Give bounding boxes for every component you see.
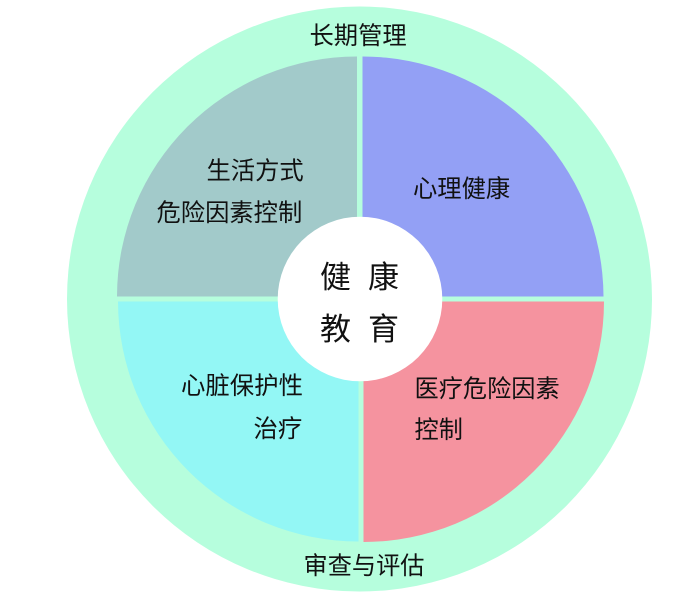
quadrant: mental health <box>362 56 604 296</box>
label: medical risk factor control <box>414 376 560 444</box>
label: cardioprotective therapy: 心脏保护性 <box>181 373 303 400</box>
label: lifestyle risk factor control: 生活方式 <box>206 158 304 185</box>
quadrant: cardioprotective therapy <box>118 302 358 542</box>
quadrant: lifestyle risk factor control <box>117 56 357 296</box>
center heading: health education: 健 <box>320 260 351 295</box>
center circle <box>278 217 442 381</box>
ring label: review and assessment: 审查与评估 <box>304 553 424 580</box>
label: cardioprotective therapy <box>181 373 303 443</box>
quadrant: medical risk factor control <box>364 302 604 542</box>
label: medical risk factor control: 控制 <box>414 417 463 444</box>
label: medical risk factor control: 医疗危险因素 <box>414 376 560 403</box>
label: lifestyle risk factor control <box>156 158 304 227</box>
label: mental health: 心理健康 <box>413 176 510 203</box>
center heading: health education: 康 <box>368 260 399 295</box>
center heading: health education <box>320 260 399 347</box>
label: lifestyle risk factor control: 危险因素控制 <box>156 200 302 227</box>
ring label: long-term management: 长期管理 <box>310 23 407 50</box>
center heading: health education: 教 <box>320 312 351 347</box>
label: cardioprotective therapy: 治疗 <box>254 416 302 443</box>
center heading: health education: 育 <box>368 312 399 347</box>
